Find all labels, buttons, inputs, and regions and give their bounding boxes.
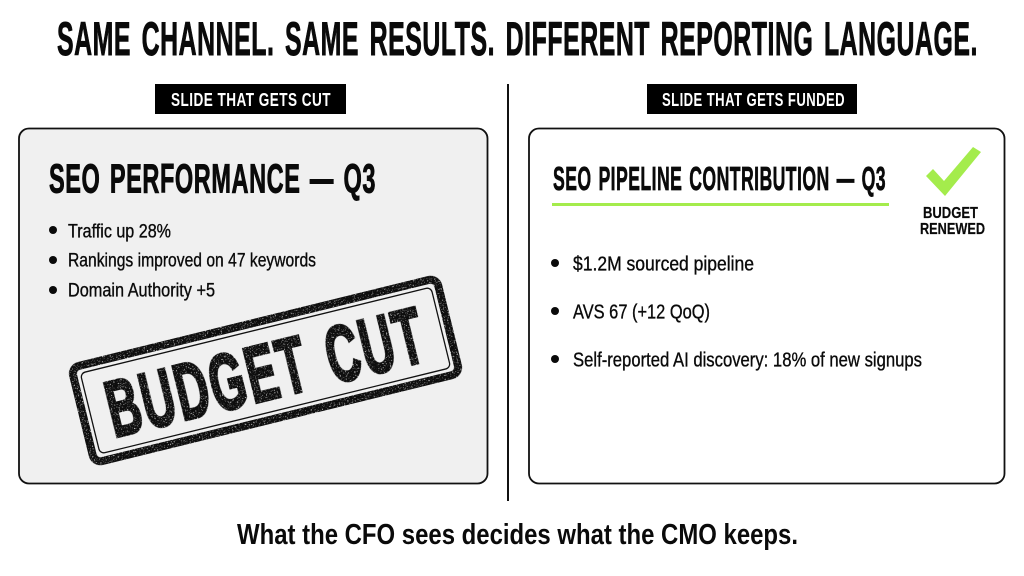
footer takeaway: What the CFO sees decides what the CMO keeps. — [237, 519, 798, 551]
bullet list: vanity metrics: Domain Authority +5 — [68, 280, 215, 302]
panel heading: SEO performance: SEO PERFORMANCE — Q3 — [49, 156, 376, 202]
label: slide that gets funded — [647, 84, 857, 114]
bullet list: vanity metrics: Traffic up 28% — [68, 222, 171, 242]
bullet list: pipeline metrics — [551, 254, 922, 372]
green underline — [552, 203, 889, 206]
badge text: budget renewed — [920, 205, 985, 238]
panel: slide that gets cut — [19, 128, 488, 484]
label: slide that gets cut — [155, 84, 346, 114]
label: slide that gets funded: SLIDE THAT GETS FUNDED — [662, 90, 845, 110]
bullet list: vanity metrics: Rankings improved on 47 keywords — [68, 250, 316, 272]
badge text: budget renewed: BUDGET — [923, 205, 978, 222]
icon: green check mark — [926, 147, 981, 196]
badge text: budget renewed: RENEWED — [920, 221, 985, 238]
panel: slide that gets funded — [529, 128, 1004, 484]
label: slide that gets cut: SLIDE THAT GETS CUT — [171, 90, 331, 110]
bullet list: pipeline metrics: AVS 67 (+12 QoQ) — [573, 302, 710, 324]
bullet list: pipeline metrics: $1.2M sourced pipeline — [573, 254, 754, 276]
bullet list: vanity metrics — [49, 222, 316, 302]
bullet list: pipeline metrics: Self-reported AI discovery: 18% of new signups — [573, 350, 922, 372]
stamp: budget cut: BUDGET CUT — [97, 290, 435, 454]
stamp: budget cut — [71, 278, 460, 463]
center divider — [507, 84, 509, 501]
